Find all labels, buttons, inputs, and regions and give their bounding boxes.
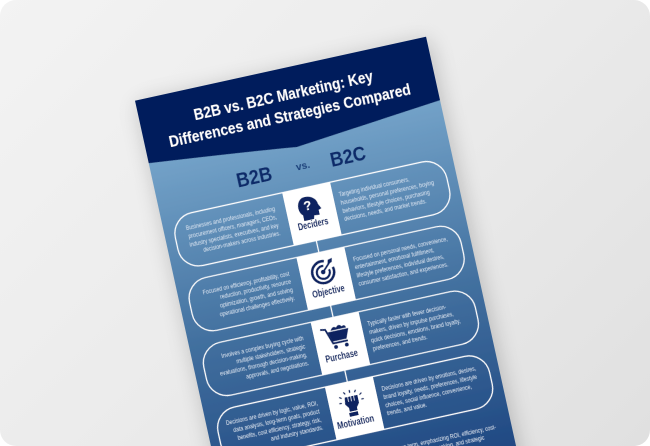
header banner [135,37,443,179]
B2B deciders text [185,206,282,257]
B2C objective text: entertainment, emotional fulfillment, [354,248,435,272]
B2C motivation text: Decisions are driven by emotions, desires, [381,366,477,393]
B2B deciders text: decision-makers across industries. [203,231,282,254]
B2B purchase text: evaluations, thorough decision-making, [220,352,308,378]
icon: head with question mark: ? [302,197,313,214]
B2B motivation text [225,401,324,446]
B2C motivation text [381,366,483,418]
B2C motivation text: choices, social influence, convenience, [385,384,473,409]
B2C deciders text: households, personal preferences, buying [340,180,435,207]
B2B objective text: operational challenges effectively. [219,296,296,319]
B2C objective text: Focused on personal needs, convenience, [353,236,449,263]
B2C purchase text: Typically faster with fewer decision- [367,305,447,328]
B2C purchase text: quick decisions, emotions, brand loyalty, [371,319,462,345]
B2B deciders text: Businesses and professionals, including [185,206,276,232]
icon: target [310,258,337,285]
B2B motivation text: Decisions are driven by logic, value, ROI, [225,401,319,427]
B2B objective text: reduction, productivity, resource [220,279,292,301]
label: objective: Objective [311,283,346,301]
B2C deciders text: Targeting individual consumers, [338,177,410,199]
B2C objective text [353,236,454,288]
paper background [135,37,538,446]
B2C objective text: lifestyle preferences, individual desires, [356,254,445,280]
B2B purchase text [216,336,310,386]
comparison headings: vs. [295,160,311,174]
icon: raised fist [337,388,367,418]
B2C deciders text: decisions, needs, and market trends. [344,199,428,223]
B2C purchase text [367,302,464,353]
comparison headings [234,143,368,192]
B2B purchase text: Involves a complex buying cycle with [221,336,304,360]
row: objective [185,222,471,347]
title: Differences and Strategies Compared [168,81,412,151]
B2C motivation text: trends, and value. [387,402,428,418]
comparison headings: B2C [328,143,368,172]
B2C purchase text: makers, driven by impulse purchases, [369,312,455,336]
label: purchase: Purchase [325,348,359,366]
icon: shopping cart [320,323,352,351]
B2C deciders text [338,172,438,223]
B2B objective text [202,271,296,321]
label: deciders: Deciders [297,216,330,234]
B2C objective text: consumer satisfaction, and experiences. [358,262,449,288]
B2B deciders text: industry specialists, executives, and key [189,223,280,249]
row: purchase [199,287,485,412]
label: motivation: Motivation [336,413,375,432]
B2B objective text: Focused on efficiency, profitability, cost [202,271,290,297]
B2C motivation text: brand loyalty, needs, preferences, lifestyle [383,374,478,401]
B2B deciders text: procurement officers, managers, CEOs, [188,214,278,240]
B2B motivation text: data analysis, long-term goals, product [233,409,321,434]
row: motivation [214,352,497,446]
B2B objective text: optimization, growth, and solving [219,288,294,310]
B2C deciders text: behaviors, lifestyle choices, purchasing [342,190,430,215]
comparison headings: B2B [234,163,274,192]
B2B motivation text: and industry standards. [270,425,324,443]
B2B purchase text: approvals, and negotiations. [246,361,310,381]
B2B motivation text: benefits, cost efficiency, strategy, risk, [237,417,323,442]
B2B purchase text: multiple stakeholders, strategic [236,344,306,366]
icon: head with question mark [296,194,323,222]
row: deciders [171,158,457,282]
title: B2B vs. B2C Marketing: Key [192,68,375,124]
B2C purchase text: preferences, and trends. [372,334,428,353]
